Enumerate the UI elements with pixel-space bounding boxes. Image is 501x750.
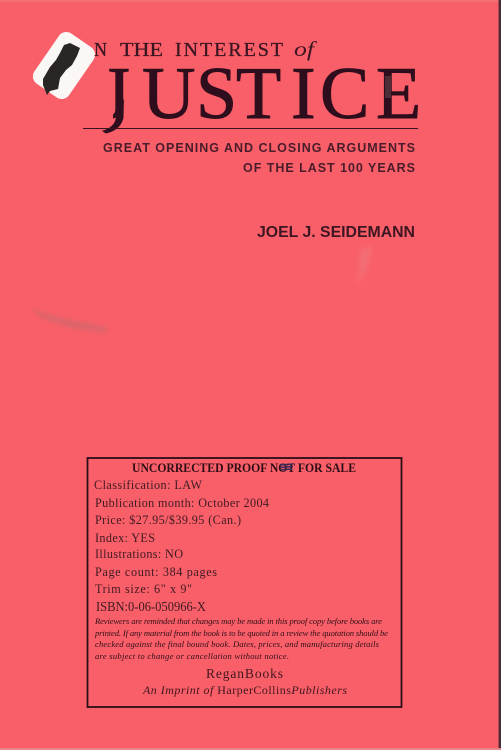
reviewer disclaimer: Reviewers are reminded that changes may be made in this proof copy before books are: [94, 616, 382, 626]
title line: In the Interest: N: [94, 39, 107, 61]
spec list: Trim size: 6" x 9": [95, 582, 192, 596]
reviewer disclaimer: [94, 616, 388, 661]
library sticker with ink: [29, 28, 99, 103]
title word: Justice: USTICE: [142, 53, 421, 135]
pen strike over NOT: [280, 464, 293, 470]
title rule: [83, 128, 418, 129]
subtitle line two: OF THE LAST 100 YEARS: [243, 161, 415, 175]
reviewer disclaimer: printed. If any material from the book is to be quoted in a review the quotation should be: [94, 628, 388, 638]
spec list: Illustrations: NO: [95, 547, 183, 561]
box border: [88, 458, 402, 707]
spec list: Price: $27.95/$39.95 (Can.): [95, 513, 241, 527]
proof information box: [88, 458, 402, 707]
print fade on E: [385, 76, 391, 98]
imprint line: An Imprint of HarperCollinsPublishers: [142, 683, 347, 697]
box heading: UNCORRECTED PROOF NOT FOR SALE: [132, 461, 356, 475]
spec list: Classification: LAW: [94, 478, 202, 492]
author: JOEL J. SEIDEMANN: [257, 224, 415, 241]
title word: of: of: [294, 37, 318, 61]
scuff mark: right: [358, 246, 372, 285]
title word: Justice: J: [101, 53, 130, 135]
title line: In the Interest: INTEREST: [175, 39, 283, 61]
spec list: Page count: 384 pages: [95, 565, 217, 579]
scuff mark: left: [30, 308, 108, 333]
spec list: Index: YES: [95, 531, 155, 545]
spec list: Publication month: October 2004: [95, 496, 269, 510]
subtitle: [103, 141, 415, 175]
ink scribble: [43, 43, 80, 95]
subtitle line one: GREAT OPENING AND CLOSING ARGUMENTS: [103, 141, 415, 155]
publisher name: ReganBooks: [206, 666, 283, 681]
reviewer disclaimer: checked against the final bound book. Dates, prices, and manufacturing details: [95, 639, 380, 649]
title line: In the Interest: THE: [120, 39, 163, 61]
spec list: [94, 478, 269, 614]
title block: [94, 37, 421, 135]
spec list: ISBN:0-06-050966-X: [96, 599, 206, 614]
reviewer disclaimer: are subject to change or cancellation without notice.: [95, 651, 289, 661]
white sticker: [29, 28, 99, 103]
